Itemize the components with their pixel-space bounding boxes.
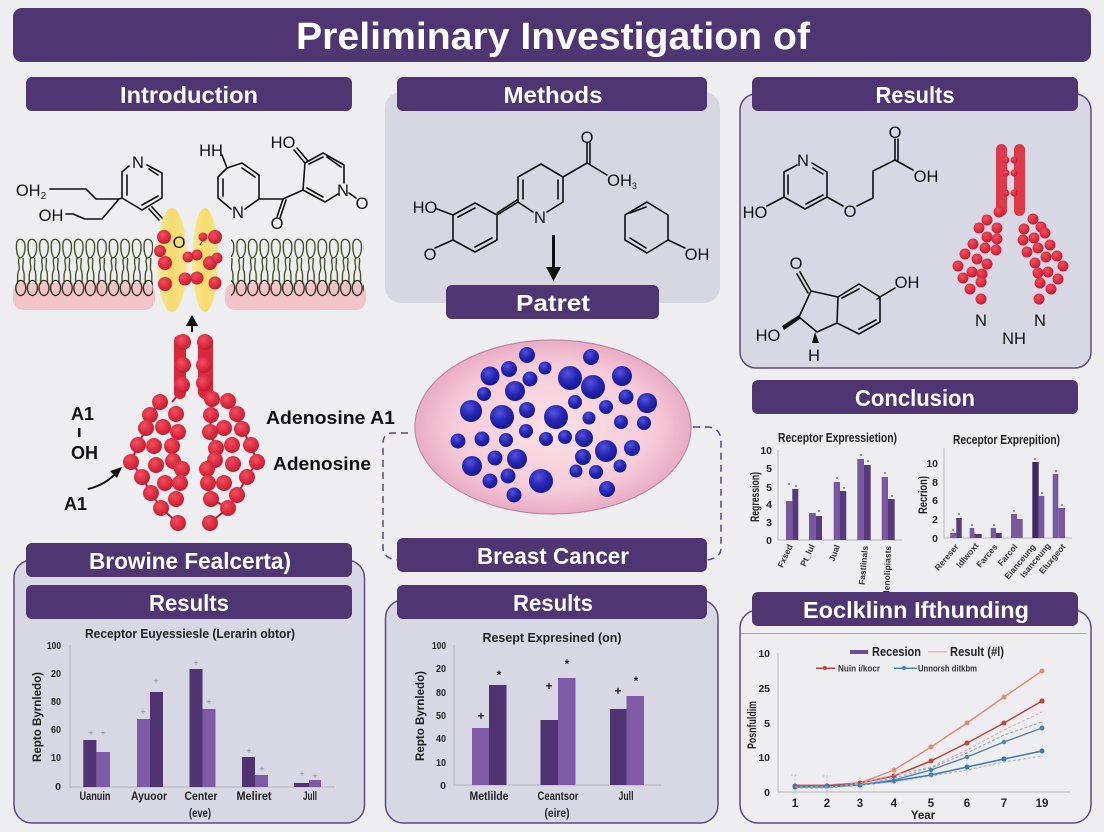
molecule: indanone: O xyxy=(790,255,803,273)
bar chart: resept expresined: Ceantsor xyxy=(538,791,579,803)
error bars: early years xyxy=(791,722,1042,796)
panel: introduction xyxy=(13,77,395,531)
bar chart: resept expresined: 20 xyxy=(436,663,446,675)
bar chart: receptor expression B xyxy=(918,432,1072,581)
line chart: axes: 25 xyxy=(758,683,770,695)
bar chart: receptor: + xyxy=(246,746,252,756)
label: Adenosine: Adenosine xyxy=(273,454,371,474)
line chart: axes: 7 xyxy=(1001,798,1007,810)
panel: lower right line chart xyxy=(740,592,1091,823)
bar chart: resept expresined: Resept Expresined (on) xyxy=(482,630,622,645)
ion channel xyxy=(154,208,222,312)
molecule: right bipyridine xyxy=(199,134,369,233)
molecule: pyridine acid: HO xyxy=(743,204,768,222)
bar chart: receptor: + xyxy=(312,771,318,781)
line chart: axes: 6 xyxy=(964,798,970,810)
title banner: Preliminary Investigation of xyxy=(296,16,810,58)
bar chart: receptor expression B: Isanceung xyxy=(1018,541,1053,579)
bar chart: receptor expression B: Idlwoxt xyxy=(954,541,981,570)
bar chart: receptor expression B: 8 xyxy=(932,477,938,489)
bar chart: receptor expression B: Farces xyxy=(974,542,1000,569)
bar chart: receptor expression B: Recrion) xyxy=(918,476,930,514)
line chart: axes: Posnfuldim xyxy=(747,701,759,749)
bar chart: receptor: Receptor Euyessiesle (Lerarin obtor) xyxy=(85,626,295,641)
protein: red receptor xyxy=(123,334,265,531)
line series: blue xyxy=(792,748,1044,790)
bar chart: receptor expression A: Receptor Expressietion) xyxy=(778,430,897,445)
label: Adenosine A1: Adenosine A1 xyxy=(266,408,395,428)
heading: results xyxy=(26,585,352,619)
bar chart: receptor: 20 xyxy=(51,668,61,680)
line chart: axes: 10 xyxy=(758,752,770,764)
heading: eoclklinn ifthunding: Eoclklinn Ifthunding xyxy=(803,597,1029,623)
line chart: axes: 5 xyxy=(764,718,770,730)
line series: dashed grey blue xyxy=(795,756,1042,787)
heading: results: Results xyxy=(149,590,229,616)
bar chart: receptor expression B: 6 xyxy=(932,495,938,507)
heading: results xyxy=(397,585,707,619)
heading: browine fealcerta xyxy=(26,543,352,577)
labels: A1 OH: A1 xyxy=(71,404,94,424)
arrow: methods to patient xyxy=(546,235,561,281)
bar chart: resept expresined: + xyxy=(614,684,622,698)
labels: A1 OH: A1 xyxy=(64,494,87,514)
molecule: methods main: 3 xyxy=(632,181,637,191)
panel: methods xyxy=(385,77,720,319)
dashed connector right xyxy=(693,427,721,560)
bar chart: receptor: Ayuoor xyxy=(131,791,167,803)
bar chart: receptor expression B: 10 xyxy=(926,458,938,470)
line series: dashed pink xyxy=(795,712,1042,787)
heading: eoclklinn ifthunding xyxy=(752,592,1078,626)
bar chart: receptor expression A: 4 xyxy=(766,499,772,511)
bar chart: receptor expression A: 10 xyxy=(760,445,772,457)
panel: lower left results xyxy=(14,543,364,823)
bar chart: receptor: + xyxy=(206,697,212,707)
bar chart: receptor: + xyxy=(299,769,305,779)
molecule: methods phenol xyxy=(625,202,709,264)
molecule: methods main: N xyxy=(534,209,546,227)
heading: results: Results xyxy=(513,590,593,616)
line chart: axes: 1 xyxy=(792,798,799,810)
bar chart: receptor: 0 xyxy=(55,781,61,793)
line chart: axes: 10 xyxy=(758,648,770,660)
molecule: right bipyridine: O xyxy=(271,215,284,233)
bar chart: receptor expression B: Eluxgeot xyxy=(1037,542,1068,576)
bar chart: resept expresined: * xyxy=(634,674,639,688)
bar chart: receptor: + xyxy=(88,728,94,738)
bar chart: resept expresined xyxy=(415,630,661,820)
molecule: right bipyridine: HH xyxy=(199,142,223,160)
bar chart: receptor: 60 xyxy=(51,724,61,736)
molecule: pyridine acid: O xyxy=(889,124,902,142)
line series: peach xyxy=(795,668,1044,785)
molecule: methods main: O xyxy=(424,246,437,264)
line chart: axes xyxy=(747,648,1070,822)
bar chart: resept expresined: * xyxy=(497,668,502,682)
protein: red receptor small: NH xyxy=(1002,330,1026,348)
molecule: pyridine acid: O xyxy=(844,203,857,221)
heading: results: Results xyxy=(876,82,954,108)
bar chart: receptor expression B: Rereser xyxy=(933,541,961,573)
bar chart: receptor expression A: Adenolipiasts xyxy=(881,545,893,602)
bar chart: receptor: 100 xyxy=(47,640,61,652)
bar chart: resept expresined: * xyxy=(565,657,570,671)
molecule: methods main: O xyxy=(581,129,594,147)
dashed connector left xyxy=(383,433,408,560)
heading: breast cancer xyxy=(397,538,707,572)
bar chart: receptor expression A: Regression) xyxy=(750,472,762,522)
bar chart: receptor expression A: Fxsed xyxy=(775,543,795,569)
bar chart: receptor expression B: Receptor Exprepition) xyxy=(953,432,1060,447)
molecule: pyridine acid: N xyxy=(797,152,809,170)
bar chart: receptor expression B: 2 xyxy=(932,514,938,526)
ion channel: O xyxy=(173,234,186,252)
bar chart: receptor: + xyxy=(259,764,265,774)
bar chart: receptor: + xyxy=(153,676,159,686)
protein: red receptor small: N xyxy=(1034,312,1046,330)
molecule: right bipyridine: HO xyxy=(271,134,296,152)
bar chart: receptor: 10 xyxy=(51,752,61,764)
bar chart: resept expresined: 40 xyxy=(436,733,446,745)
bar chart: receptor: (eve) xyxy=(189,808,211,820)
bar chart: resept expresined: + xyxy=(545,679,553,693)
molecule: right bipyridine: O xyxy=(356,195,369,213)
chart legend: Unnorsh ditkbm xyxy=(918,664,977,674)
chart legend: Result (#l) xyxy=(950,645,1004,659)
molecule: left pyridine: OH xyxy=(16,182,41,200)
molecule: indanone xyxy=(756,255,919,365)
chart legend: Recesion xyxy=(872,645,921,659)
molecule: indanone: OH xyxy=(895,274,919,292)
membrane: left bilayer xyxy=(13,238,155,310)
line series: mid blue xyxy=(795,726,1044,787)
bar chart: receptor: + xyxy=(193,658,199,668)
bar chart: receptor: Uanuin xyxy=(80,791,110,803)
protein: red receptor small: N xyxy=(975,312,987,330)
bar chart: receptor expression A: Fastlinals xyxy=(857,545,870,585)
bar chart: receptor expression B: 0 xyxy=(932,533,938,545)
bar chart: receptor: Meliret xyxy=(236,791,272,803)
heading: breast cancer: Breast Cancer xyxy=(477,543,629,569)
membrane: right bilayer xyxy=(225,238,366,310)
bar chart: receptor: Repto Byrnledo) xyxy=(32,672,44,762)
molecule: methods main xyxy=(413,129,637,264)
chart legend: Nuin i/kocr xyxy=(838,664,880,674)
arrow: A1 to receptor xyxy=(88,467,122,489)
panel: results right top xyxy=(740,77,1091,368)
bar chart: receptor expression A: 5 xyxy=(766,463,772,475)
bar chart: receptor xyxy=(32,626,335,820)
bar chart: receptor: + xyxy=(100,728,106,738)
line chart: axes: 4 xyxy=(891,798,898,810)
line series: dashed blue xyxy=(795,722,1042,788)
molecule: methods main: HO xyxy=(413,199,438,217)
bar chart: receptor: Jull xyxy=(303,791,317,803)
bar chart: receptor expression B: Eianceung xyxy=(1002,542,1038,581)
bar chart: resept expresined: Jull xyxy=(618,791,634,803)
molecule: left pyridine: N xyxy=(132,154,144,172)
molecule: right bipyridine: N xyxy=(337,182,349,200)
molecule: indanone: HO xyxy=(756,327,781,345)
bar chart: resept expresined: 10 xyxy=(436,757,446,769)
bar chart: resept expresined: 100 xyxy=(432,640,446,652)
labels: A1 OH xyxy=(64,404,98,514)
bar chart: receptor: + xyxy=(140,707,146,717)
molecule: methods phenol: OH xyxy=(685,246,709,264)
bar chart: resept expresined: Repto Byrnledo) xyxy=(415,671,427,761)
bar chart: receptor expression A: Jual xyxy=(827,543,842,563)
line chart: axes: 2 xyxy=(824,798,830,810)
bar chart: receptor: 80 xyxy=(51,696,61,708)
bar chart: resept expresined: 80 xyxy=(436,687,446,699)
bar chart: receptor expression A: 0 xyxy=(766,535,772,547)
bar chart: receptor expression B: Farcol xyxy=(995,542,1020,568)
line series: red xyxy=(792,698,1044,788)
bar chart: receptor expression A: 3 xyxy=(766,517,772,529)
line chart: axes: 19 xyxy=(1036,798,1048,810)
bar chart: resept expresined: 50 xyxy=(436,710,446,722)
chart legend xyxy=(816,645,1004,674)
heading: conclusion: Conclusion xyxy=(855,385,975,411)
bar chart: receptor: Center xyxy=(184,791,218,803)
line chart: axes: 3 xyxy=(857,798,863,810)
panel: lower middle results xyxy=(386,585,718,823)
bar chart: receptor expression A: Pt_lul xyxy=(798,543,817,568)
protein: red receptor small xyxy=(952,144,1068,348)
molecule: pyridine acid xyxy=(743,124,938,222)
molecule: left pyridine: OH xyxy=(39,207,63,225)
heading: browine fealcerta: Browine Fealcerta) xyxy=(89,548,291,574)
line chart: axes: Year xyxy=(911,810,936,822)
illustration: breast cancer cell xyxy=(415,340,691,514)
heading: introduction xyxy=(26,77,352,111)
heading: patient xyxy=(446,285,659,319)
heading: conclusion xyxy=(752,380,1078,414)
labels: A1 OH: OH xyxy=(71,443,98,463)
molecule: methods main: OH xyxy=(607,172,632,190)
bar chart: resept expresined: + xyxy=(477,709,485,723)
molecule: indanone: H xyxy=(808,347,820,365)
arrow: up to channel xyxy=(188,317,196,332)
bar chart: resept expresined: Metlilde xyxy=(470,791,508,803)
molecule: right bipyridine: N xyxy=(232,204,244,222)
bar chart: receptor expression A xyxy=(750,430,902,602)
bar chart: resept expresined: (eire) xyxy=(544,808,570,820)
bar chart: resept expresined: 0 xyxy=(440,780,446,792)
heading: methods xyxy=(397,77,707,111)
bar chart: receptor expression A: 5 xyxy=(766,482,772,494)
title banner xyxy=(13,8,1091,62)
molecule: pyridine acid: OH xyxy=(914,168,938,186)
heading: introduction: Introduction xyxy=(120,82,258,108)
line chart: axes: 5 xyxy=(928,798,935,810)
heading: methods: Methods xyxy=(504,82,602,108)
heading: patient: Patret xyxy=(516,290,590,316)
line chart: axes: 0 xyxy=(764,787,770,799)
molecule: left pyridine xyxy=(16,154,162,225)
heading: results xyxy=(752,77,1078,111)
molecule: left pyridine: 2 xyxy=(41,191,47,202)
